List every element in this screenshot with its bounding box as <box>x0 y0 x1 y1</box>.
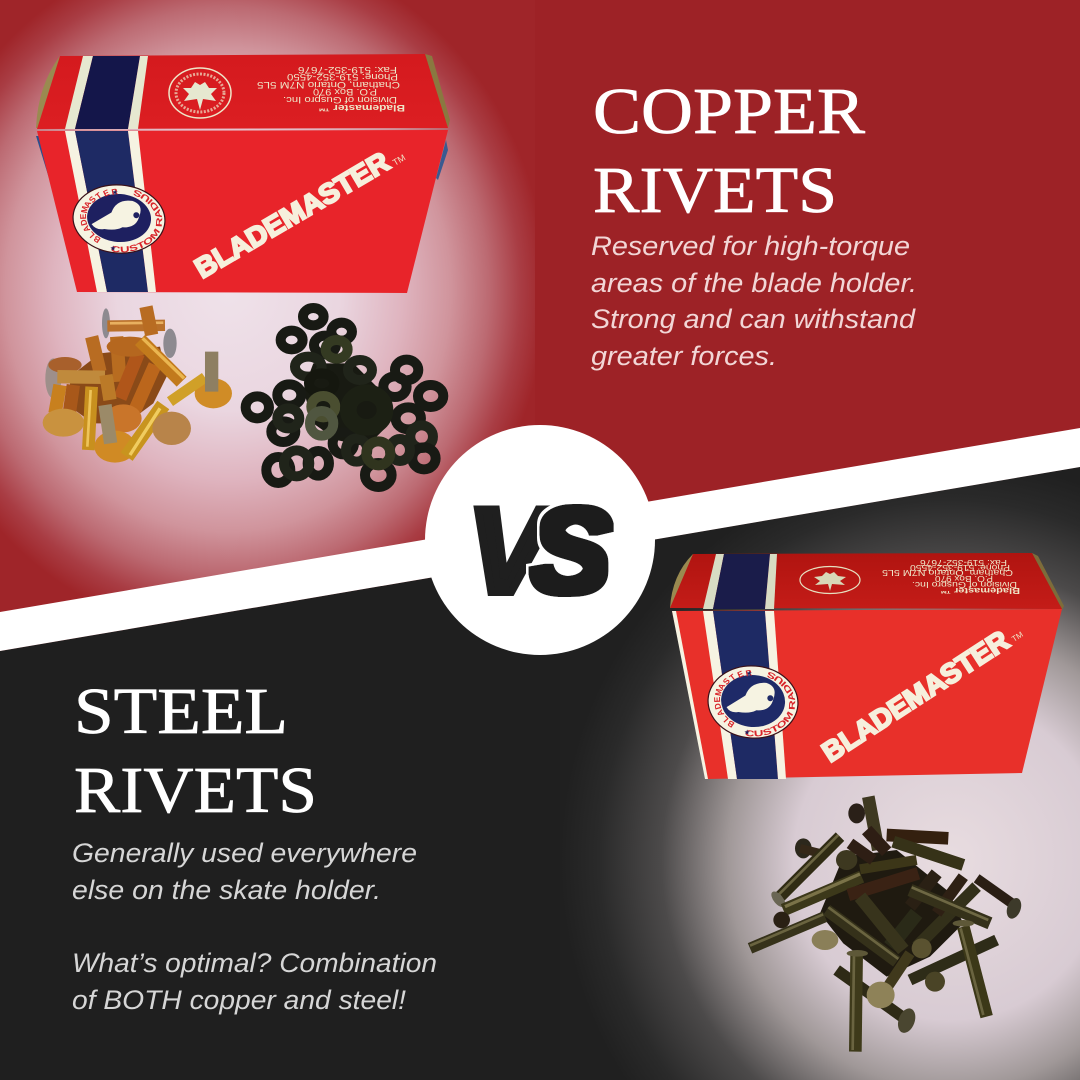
text block: copper description <box>591 231 917 371</box>
box address text: Chatham, Ontario N7M 5L5 <box>257 79 400 90</box>
box address text: Blademaster ™ <box>940 586 1020 595</box>
vs badge: S <box>531 484 611 618</box>
heading: copper rivets: COPPER <box>593 75 865 148</box>
box address text: P.O. Box 970 <box>934 574 993 583</box>
text block: steel description: Generally used everywhere <box>72 838 417 868</box>
maple leaf seal <box>800 566 860 594</box>
box address text <box>881 558 1020 595</box>
custom radius seal: BLADEMASTER <box>710 665 753 731</box>
vs badge <box>425 425 655 655</box>
product photo: copper rivet box: TM <box>391 152 407 168</box>
product photo: steel rivet box: TM <box>1010 630 1025 644</box>
panel: steel background <box>0 440 1080 1080</box>
custom radius seal: ★ <box>744 728 750 737</box>
box wordmark: BLADEMASTER <box>189 146 395 284</box>
heading: steel rivets: STEEL <box>74 675 288 748</box>
text block: steel description: of BOTH copper and steel! <box>72 985 407 1015</box>
heading: steel rivets <box>74 675 317 827</box>
product photo: black washers pile <box>246 308 443 487</box>
custom radius seal: CUSTOM RADIUS <box>111 190 162 252</box>
custom radius seal: CUSTOM RADIUS <box>746 672 796 736</box>
product photo: steel rivets pile <box>750 797 1024 1052</box>
custom radius seal <box>707 665 799 739</box>
text block: copper description: greater forces. <box>591 341 777 371</box>
box front face <box>37 130 448 293</box>
product photo: copper rivets pile <box>43 307 232 463</box>
box address text: Phone: 519-352-4550 <box>287 71 398 82</box>
product photo: copper rivet box <box>36 54 450 293</box>
box top face <box>37 54 448 129</box>
custom radius seal: BLADEMASTER <box>76 184 119 247</box>
maple leaf seal <box>169 68 231 118</box>
text block: steel description: else on the skate holder. <box>72 875 381 905</box>
box wordmark: BLADEMASTER <box>816 624 1014 768</box>
text block: copper description: areas of the blade holder. <box>591 268 917 298</box>
box address text: Phone: 519-352-4550 <box>909 563 1010 572</box>
custom radius seal: ★ <box>110 244 116 253</box>
box top face <box>670 553 1062 609</box>
custom radius seal: ★ <box>112 188 118 197</box>
box address text: Fax: 519-352-7676 <box>919 558 1007 567</box>
custom radius seal: ★ <box>746 669 753 678</box>
custom radius seal <box>72 184 166 254</box>
box front face <box>672 609 1062 779</box>
box address text: P.O. Box 970 <box>313 86 377 97</box>
box address text: Chatham, Ontario N7M 5L5 <box>881 568 1013 577</box>
text block: copper description: Strong and can withstand <box>591 304 916 334</box>
diagonal white divider band <box>0 428 1080 651</box>
text block: steel description <box>72 838 437 1015</box>
box address text: Division of Guspro Inc. <box>912 580 1017 589</box>
box address text: Division of Guspro Inc. <box>283 94 397 105</box>
heading: copper rivets <box>593 75 865 227</box>
box address text: Fax: 519-352-7676 <box>298 64 397 75</box>
panel: copper background <box>0 0 1080 660</box>
heading: copper rivets: RIVETS <box>593 154 837 227</box>
heading: steel rivets: RIVETS <box>74 754 317 827</box>
box address text <box>257 64 405 113</box>
product photo: steel rivet box <box>670 553 1064 779</box>
box address text: Blademaster ™ <box>318 103 405 113</box>
vs badge: V <box>468 484 557 618</box>
text block: copper description: Reserved for high-torque <box>591 231 910 261</box>
text block: steel description: What’s optimal? Combination <box>72 948 437 978</box>
